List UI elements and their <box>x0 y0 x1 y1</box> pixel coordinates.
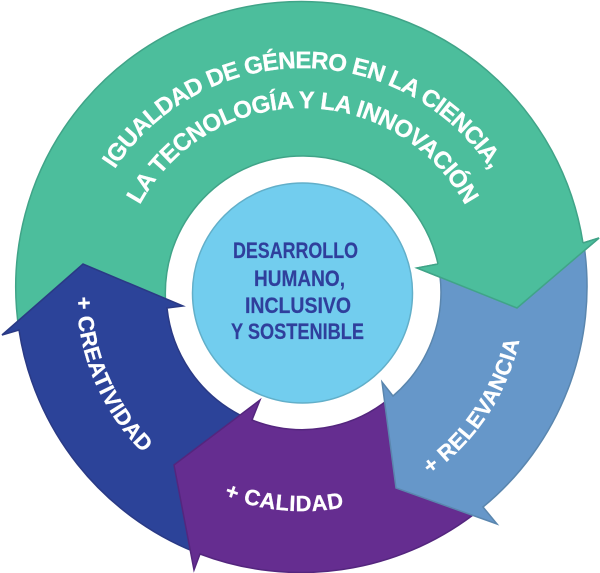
arrow: light blue relevance segment <box>380 250 588 526</box>
heading: first curved line: IGUALDAD DE GÉNERO EN LA CIENCIA, <box>102 48 497 170</box>
label: relevancia: + RELEVANCIA <box>426 341 520 470</box>
arrow: green gender equality segment <box>14 0 600 321</box>
arrow: dark blue creativity segment <box>2 263 240 551</box>
center text: INCLUSIVO <box>245 293 351 318</box>
label: calidad: + CALIDAD <box>226 486 342 512</box>
center text: HUMANO, <box>254 266 345 291</box>
center text <box>231 238 364 344</box>
arrow: purple quality segment <box>173 398 473 573</box>
center text: DESARROLLO <box>233 238 358 263</box>
green arrowhead overlap <box>417 238 599 308</box>
label: creatividad: + CREATIVIDAD <box>78 297 151 450</box>
heading: second curved line: LA TECNOLOGÍA Y LA INNOVACIÓN <box>126 88 480 204</box>
center text: Y SOSTENIBLE <box>231 319 364 344</box>
center circle <box>192 183 412 403</box>
